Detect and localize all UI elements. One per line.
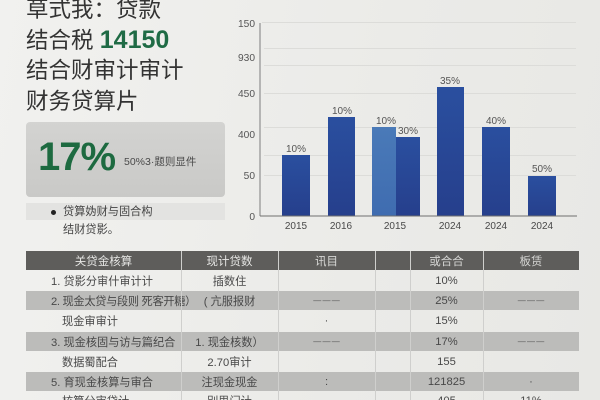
title line 4: 财务贷算片: [26, 89, 139, 114]
x axis labels: 2015: [384, 221, 407, 232]
x axis: [260, 215, 577, 217]
note text: [63, 205, 153, 236]
row 4: — — —: [313, 337, 340, 346]
bar chart: [238, 19, 577, 232]
header: column 5: 或合合: [429, 256, 464, 268]
row 6: :: [325, 376, 328, 388]
row 6: 121825: [428, 376, 465, 388]
row 4 cells: 3. 现金核固与访与篇纪合: [51, 336, 175, 348]
row 4: — — —: [518, 337, 544, 346]
header: column 3: 讯目: [315, 256, 338, 268]
bar value labels: 10%: [376, 116, 396, 127]
bars: [282, 87, 556, 216]
light strip behind note: [26, 203, 225, 220]
bar value labels: 35%: [440, 76, 460, 87]
bar value labels: 50%: [532, 164, 552, 175]
row 2 cells: 2. 现金太贷与段则 死客开糖）: [51, 296, 196, 308]
key figure caption: 50%3·题则显件: [124, 156, 196, 168]
title line 2 with green number: 结合税 14150: [26, 26, 169, 54]
row 2: — — —: [313, 296, 340, 305]
row 4: 1. 现金核数）: [195, 336, 264, 348]
row 4: [26, 332, 579, 351]
row 5: [62, 356, 456, 368]
row 6 cells: 5. 育现金核算与审合: [51, 376, 153, 388]
y axis labels: 930: [238, 53, 255, 64]
row 2: ( 亢服报财: [204, 296, 255, 308]
x axis labels: 2024: [531, 221, 554, 232]
data table: [26, 251, 579, 400]
y axis labels: [238, 19, 255, 223]
key figure 17%: 17%: [38, 135, 115, 179]
header: column 2: 现计贷数: [206, 256, 252, 268]
row 6: ·: [529, 376, 533, 388]
row 1: 10%: [435, 274, 458, 286]
row 6: [26, 372, 579, 391]
note text: 结财贷影。: [63, 224, 119, 236]
row 3: ·: [325, 315, 328, 327]
y axis labels: 400: [238, 130, 255, 141]
bullet dot: [51, 210, 56, 215]
x axis labels: 2015: [285, 221, 308, 232]
row 3 cells: 现金审审计: [62, 316, 118, 328]
row 4: 17%: [435, 336, 458, 348]
row 3: [62, 315, 458, 328]
header: column 6: 板赁: [520, 256, 542, 268]
row 1: 插数住: [213, 276, 246, 288]
bar value labels: 30%: [398, 126, 418, 137]
row 1 cells: 1. 贷影分审什审计计: [51, 276, 153, 288]
bullet note: [51, 205, 153, 236]
row 7: [62, 394, 542, 400]
bar value labels: 10%: [286, 144, 306, 155]
bar value labels: [286, 76, 552, 175]
row 5: 2.70审计: [207, 356, 252, 368]
y axis labels: 150: [238, 19, 255, 30]
y axis labels: 0: [249, 212, 255, 223]
row 5 cells: 数据蜀配合: [62, 356, 118, 368]
row 2: 25%: [435, 294, 458, 306]
header: column 1: 关贷金核算: [75, 256, 132, 268]
bar value labels: 40%: [486, 116, 506, 127]
y axis labels: 450: [238, 89, 255, 100]
panel: key figure: [26, 122, 225, 197]
row 6: 注现金现金: [202, 376, 257, 388]
title line 3: 结合财审计审计: [26, 58, 184, 83]
note text: 贷算妫财与固合构: [63, 206, 153, 218]
bar value labels: 10%: [332, 106, 352, 117]
table header: [26, 251, 579, 270]
y axis labels: 50: [244, 171, 255, 182]
row 2: — — —: [518, 296, 544, 305]
y axis: [238, 19, 260, 223]
x axis labels: 2024: [485, 221, 508, 232]
row 2: [26, 291, 579, 310]
x axis labels: 2024: [439, 221, 462, 232]
title block: [26, 0, 184, 114]
row 3: 15%: [435, 315, 458, 327]
row 5: 155: [437, 356, 456, 368]
x axis labels: 2016: [330, 221, 353, 232]
x axis labels: [285, 221, 554, 232]
row 1: [51, 274, 458, 288]
